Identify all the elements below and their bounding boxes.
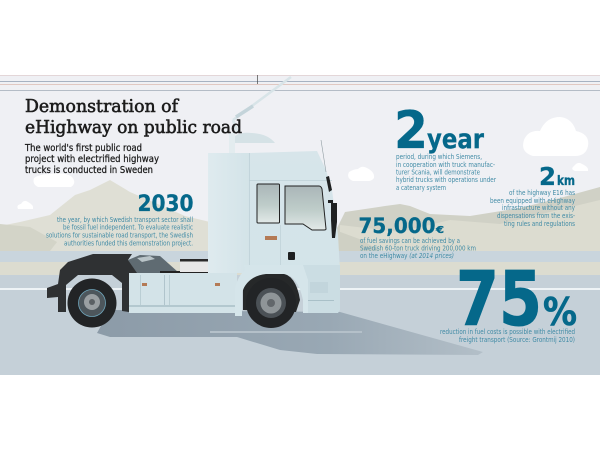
antenna [321,140,326,172]
stat: 75,000 euro: on the eHighway (at 2014 prices) [360,252,454,260]
stat: 2 year: 2 [394,101,428,161]
mirrors [326,176,337,238]
stat: 2 year: turer Scania, will demonstrate [396,168,480,176]
truck [47,140,340,328]
rear wheel [68,278,116,328]
stat: 2 year: period, during which Siemens, [396,153,482,161]
road shadow [97,310,483,355]
stat: 2030 [46,192,194,248]
stat: 2 km: km [557,174,575,189]
side skirt [129,273,237,313]
stat: 2 km: of the highway E16 has [509,189,575,197]
cab details [265,236,277,240]
stat: 2030: solutions for sustainable road transport, the Swedish [46,232,193,240]
title: eHighway on public road [25,117,242,138]
stat: 75 percent: reduction in fuel costs is possible with electrified [440,328,575,336]
background scene [0,75,600,375]
stat: 2 km [490,162,575,228]
subtitle: project with electrified highway [25,154,159,165]
stat: 2 year: hybrid trucks with operations under [396,176,496,184]
stat: 75,000 euro: 75,000 [358,214,436,238]
catenary wires [0,75,600,91]
tractor chassis [47,254,208,312]
subtitle: trucks is conducted in Sweden [25,165,153,176]
stat: 2 year: in cooperation with truck manufac- [396,161,495,169]
stat: 75,000 euro [358,214,476,260]
stat: 2030: authorities funded this demonstration project. [64,240,193,248]
front wheel [246,278,296,328]
stat: 2 km: dispensations from the exis- [497,212,575,220]
front bumper [303,265,340,313]
stat: 2 km: 2 [539,162,556,191]
stat: 75,000 euro: Swedish 60-ton truck driving 200,000 km [360,244,476,252]
cab body [243,151,340,273]
stat: 75 percent: freight transport (Source: Grontmij 2010) [459,336,575,344]
title [25,96,242,138]
pantograph [229,77,291,153]
subtitle [24,143,159,176]
stat: 2 km: been equipped with eHighway [490,197,575,205]
stat: 75,000 euro: of fuel savings can be achieved by a [360,237,460,245]
stat: 2 km: infrastructure without any [502,204,575,212]
title: Demonstration of [25,96,179,117]
stat: 2 year: year [427,124,485,155]
stat: 2030: 2030 [138,192,194,217]
mountains right [335,187,600,251]
windows [257,184,326,230]
stat: 75 percent: 75 [456,255,542,343]
stat: 2 year [394,101,496,192]
stat: 75,000 euro: € [435,225,444,236]
clouds [17,117,588,209]
wheel arch [235,265,308,316]
stat: 75 percent: % [543,290,577,334]
stat: 2 km: ting rules and regulations [504,220,575,228]
mountains left [0,180,210,251]
stat: 2 year: a catenary system [396,184,446,192]
cab rear wall [208,153,249,273]
stat: 2030: the year, by which Swedish transport sector shall [57,216,193,224]
subtitle: The world's first public road [24,143,142,154]
stat: 2030: be fossil fuel independent. To evaluate realistic [63,224,193,232]
